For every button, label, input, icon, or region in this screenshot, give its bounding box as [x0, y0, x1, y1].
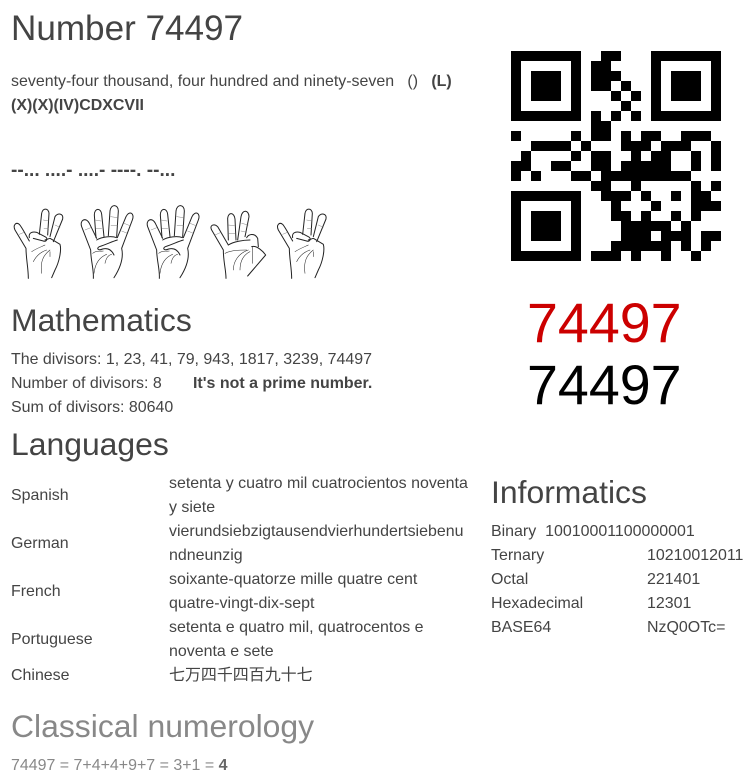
- number in words: seventy-four thousand, four hundred and ninety-seven () (L): [11, 73, 452, 90]
- roman numeral: (X)(X)(IV)CDXCVII: [11, 97, 144, 114]
- portuguese text: [169, 619, 424, 660]
- spanish label: Spanish: [11, 487, 69, 504]
- prime status: It's not a prime number.: [193, 375, 372, 392]
- french label: French: [11, 583, 61, 600]
- chinese text: 七万四千四百九十七: [169, 667, 313, 684]
- informatics table: [491, 523, 743, 636]
- ternary value: 10210012011: [647, 547, 743, 564]
- languages table: [11, 475, 468, 684]
- heading: mathematics: Mathematics: [11, 302, 192, 338]
- sum of divisors: Sum of divisors: 80640: [11, 399, 173, 416]
- large black number: 74497: [527, 354, 682, 416]
- heading: classical numerology: Classical numerology: [11, 708, 314, 744]
- hexadecimal value: 12301: [647, 595, 691, 612]
- hand: nine: [211, 211, 266, 278]
- large red number: 74497: [527, 292, 682, 354]
- german label: German: [11, 535, 69, 552]
- spanish text: setenta y cuatro mil cuatrocientos noventa: [169, 475, 468, 492]
- portuguese text: setenta e quatro mil, quatrocentos e: [169, 619, 424, 636]
- number of divisors: Number of divisors: 8: [11, 375, 162, 392]
- ternary label: Ternary: [491, 547, 544, 564]
- divisors: The divisors: 1, 23, 41, 79, 943, 1817, 3239, 74497: [11, 351, 372, 368]
- chinese label: Chinese: [11, 667, 70, 684]
- hand: four: [147, 206, 199, 278]
- morse code: --... ....- ....- ----. --...: [11, 160, 175, 181]
- title: Number 74497: [11, 9, 243, 48]
- number in words and roman numeral: [11, 73, 452, 114]
- base64 value: NzQ0OTc=: [647, 619, 725, 636]
- spanish text: y siete: [169, 499, 215, 516]
- french text: [169, 571, 418, 612]
- french text: quatre-vingt-dix-sept: [169, 595, 314, 612]
- german text: ndneunzig: [169, 547, 243, 564]
- base64 label: BASE64: [491, 619, 551, 636]
- spanish text: [169, 475, 468, 516]
- numerology calculation: 74497 = 7+4+4+9+7 = 3+1 = 4: [11, 757, 227, 774]
- sign language hands: [14, 205, 327, 279]
- hand: seven: [278, 209, 326, 278]
- german text: vierundsiebzigtausendvierhundertsiebenu: [169, 523, 463, 540]
- heading: informatics: Informatics: [491, 474, 647, 510]
- heading: languages: Languages: [11, 426, 169, 462]
- portuguese text: noventa e sete: [169, 643, 274, 660]
- octal label: Octal: [491, 571, 528, 588]
- hand: four: [81, 206, 133, 278]
- hand: seven: [14, 209, 63, 278]
- octal value: 221401: [647, 571, 700, 588]
- mathematics facts: [11, 351, 372, 416]
- hexadecimal label: Hexadecimal: [491, 595, 583, 612]
- german text: [169, 523, 463, 564]
- portuguese label: Portuguese: [11, 631, 93, 648]
- french text: soixante-quatorze mille quatre cent: [169, 571, 417, 588]
- binary: Binary 10010001100000001: [491, 523, 695, 540]
- QR code: [511, 51, 721, 261]
